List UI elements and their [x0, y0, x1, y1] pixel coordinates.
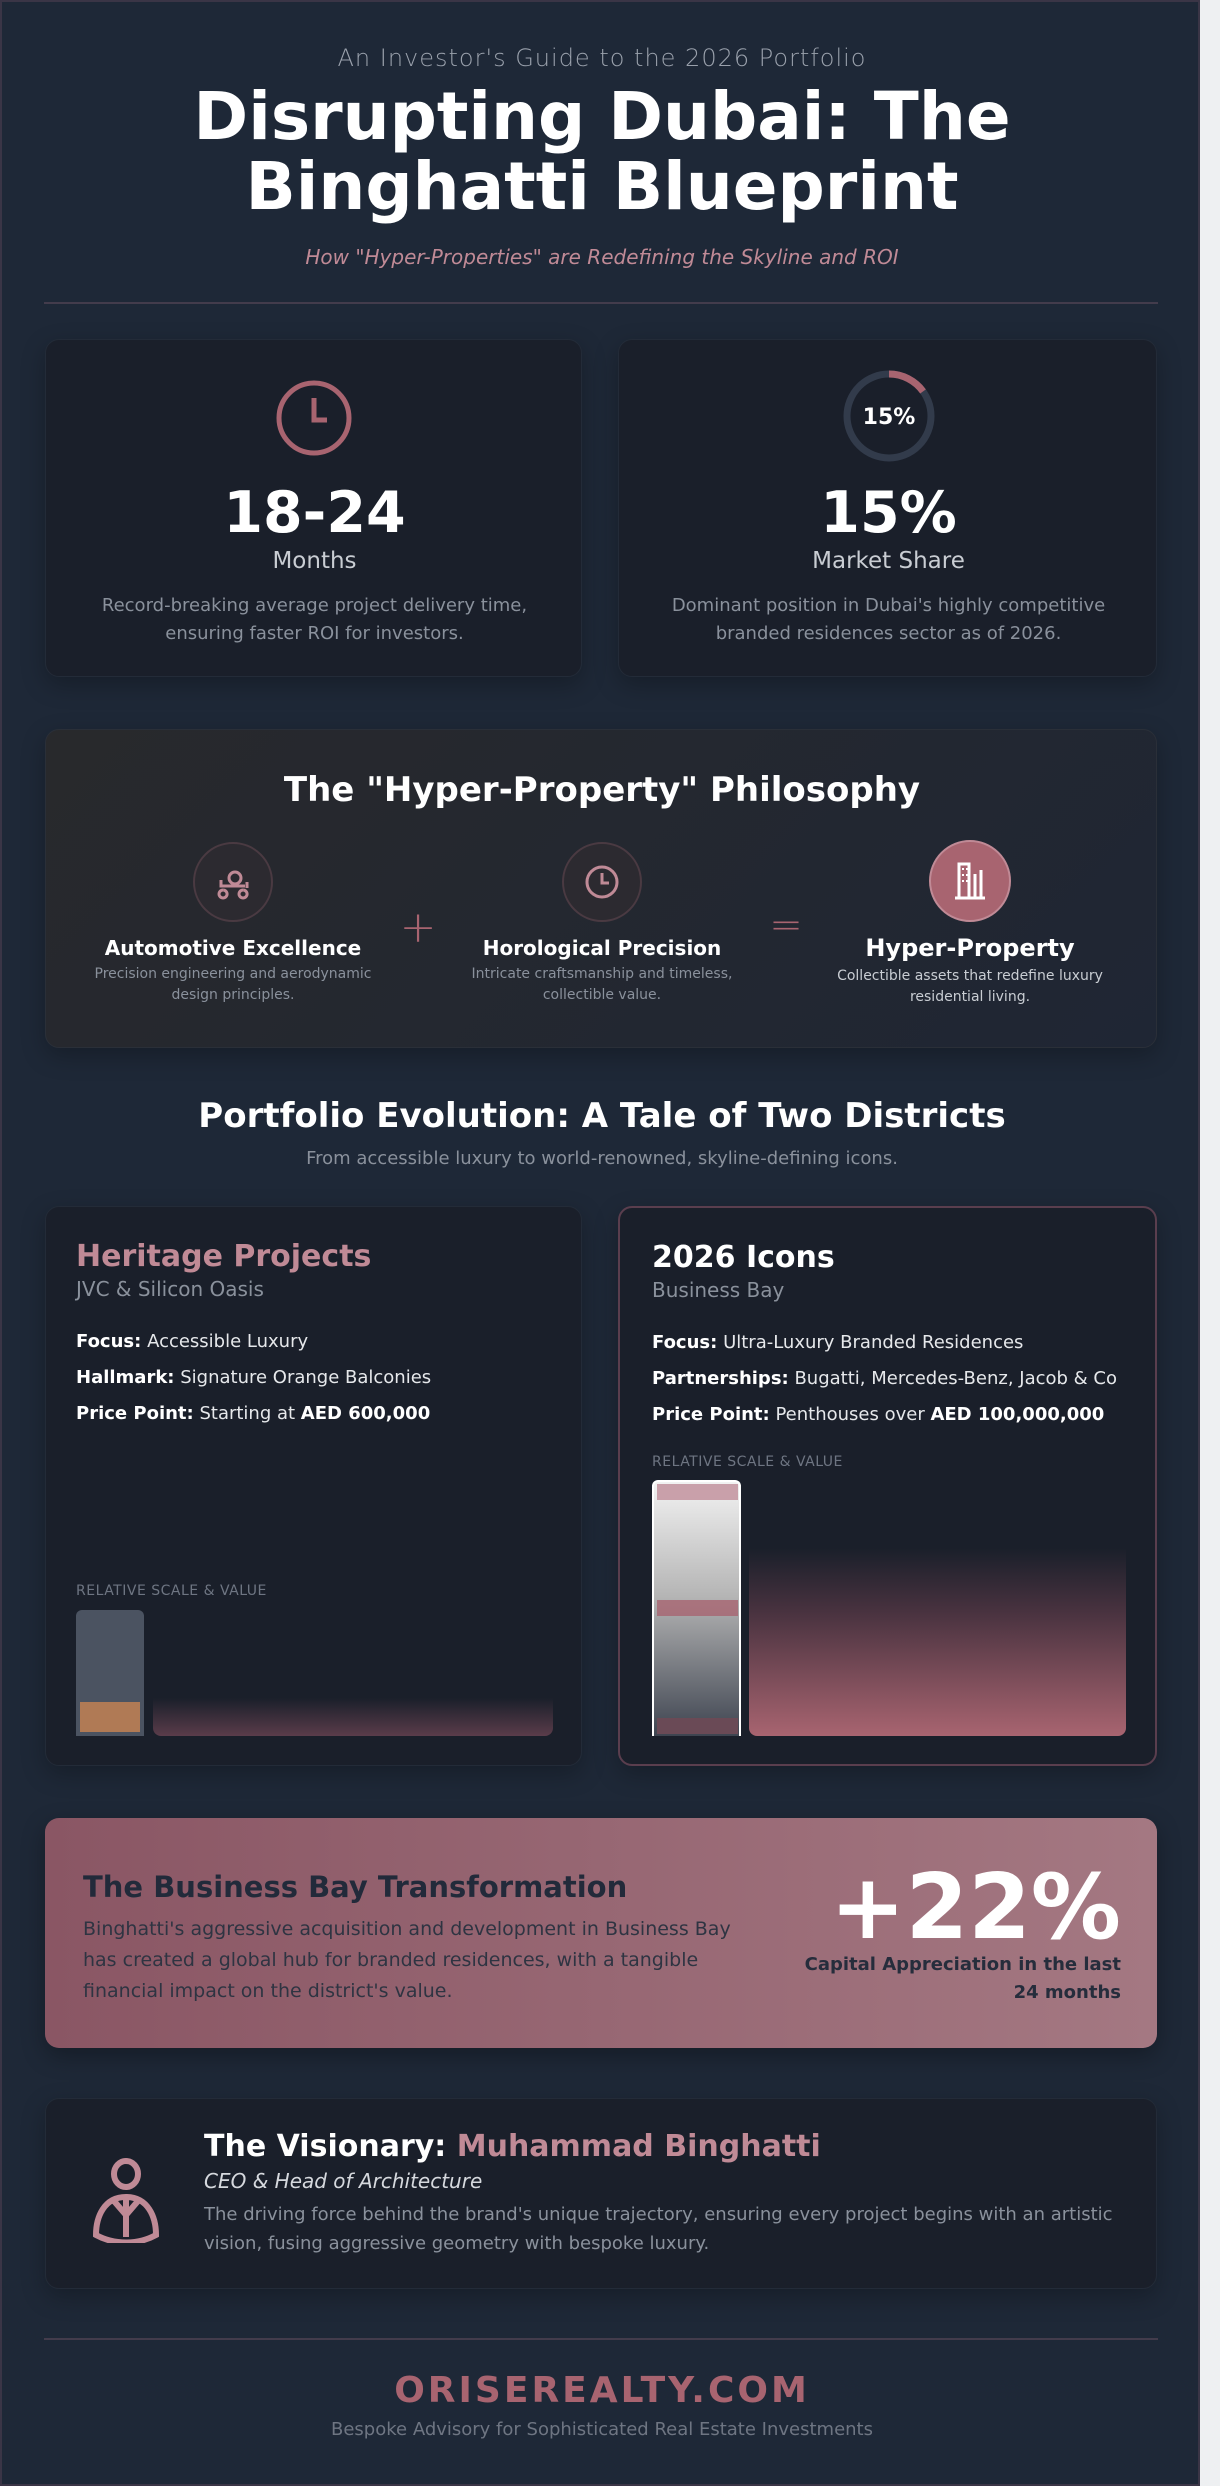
panel: the visionary: CEO & Head of Architecture: [204, 2169, 482, 2193]
panel: 2026 icons: 2026 Icons: [652, 1240, 835, 1275]
details: [76, 1331, 431, 1424]
item: hyper-property: Hyper-Property: [865, 934, 1075, 962]
section subheading: From accessible luxury to world-renowned, skyline-defining icons.: [306, 1148, 898, 1169]
value: 18-24: [223, 480, 406, 546]
stat card: market share: [618, 339, 1157, 677]
panel: hyper-property philosophy: [45, 729, 1157, 1048]
item: horological: Intricate craftsmanship and timeless, collectible value.: [472, 966, 732, 1003]
section heading: portfolio evolution: Portfolio Evolution: A Tale of Two Districts: [198, 1096, 1006, 1136]
panel: heritage projects: Heritage Projects: [76, 1239, 371, 1274]
panel: 2026 icons: RELATIVE SCALE & VALUE: [652, 1454, 843, 1470]
details: Partnerships: Bugatti, Mercedes-Benz, Jacob & Co: [652, 1368, 1117, 1389]
panel: heritage projects: [45, 1206, 582, 1766]
item: hyper-property: Collectible assets that redefine luxury residential living.: [837, 968, 1103, 1005]
details: Hallmark: Signature Orange Balconies: [76, 1367, 431, 1388]
donut chart 15%: [844, 370, 934, 462]
details: Price Point: Penthouses over AED 100,000,000: [652, 1404, 1104, 1425]
item: automotive: Automotive Excellence: [105, 936, 361, 960]
donut chart 15%: 15%: [863, 405, 915, 430]
details: Focus: Ultra-Luxury Branded Residences: [652, 1332, 1023, 1353]
equals sign: =: [769, 902, 803, 948]
item: horological: Horological Precision: [483, 936, 721, 960]
item: horological: [472, 842, 732, 1003]
stat card: market share: Dominant position in Dubai's highly competitive branded residences sector as of 2026.: [672, 595, 1105, 644]
details: Price Point: Starting at AED 600,000: [76, 1403, 430, 1424]
stat card: market share: 15%: [820, 480, 957, 546]
icon: car: [193, 842, 273, 922]
details: [652, 1332, 1117, 1425]
item: automotive: [94, 842, 371, 1003]
panel: heritage projects: JVC & Silicon Oasis: [76, 1277, 264, 1301]
footer tagline: Bespoke Advisory for Sophisticated Real Estate Investments: [331, 2419, 873, 2440]
tagline: How "Hyper-Properties" are Redefining the Skyline and ROI: [305, 245, 899, 269]
callout: business bay transformation: Capital Appreciation in the last 24 months: [805, 1954, 1121, 2003]
item: automotive: Precision engineering and aerodynamic design principles.: [94, 966, 371, 1003]
callout: business bay transformation: The Business Bay Transformation: [83, 1870, 627, 1904]
icon: person: [93, 2158, 159, 2243]
icon: watch: [562, 842, 642, 922]
stat card: market share: Market Share: [812, 548, 965, 574]
panel: the visionary: The Visionary: Muhammad Binghatti: [204, 2129, 821, 2164]
title: [193, 78, 1011, 225]
stat: +22%: +22%: [830, 1855, 1121, 1960]
panel: 2026 icons: Business Bay: [652, 1278, 784, 1302]
scale chart: tall tower: [652, 1480, 741, 1736]
stat card: delivery time: Months: [272, 548, 357, 574]
heading: The "Hyper-Property" Philosophy: [284, 770, 920, 810]
title: Binghatti Blueprint: [245, 148, 958, 225]
icon: building: [929, 840, 1011, 922]
plus sign: +: [400, 902, 436, 953]
callout: business bay transformation: [45, 1818, 1157, 2048]
stat card: delivery time: [45, 339, 582, 677]
header subtitle: An Investor's Guide to the 2026 Portfolio: [338, 44, 866, 72]
panel: the visionary: The driving force behind the brand's unique trajectory, ensuring every project begins with an artistic vision, fusing aggressive geometry with bespoke luxury.: [204, 2204, 1113, 2254]
panel: 2026 icons: [618, 1206, 1157, 1766]
panel: heritage projects: RELATIVE SCALE & VALUE: [76, 1583, 267, 1599]
icon: clock: [276, 380, 352, 456]
stat card: delivery time: Record-breaking average project delivery time, ensuring faster ROI for investors.: [102, 595, 527, 644]
title: Disrupting Dubai: The: [193, 78, 1011, 155]
details: Focus: Accessible Luxury: [76, 1331, 308, 1352]
scale chart: small tower: [76, 1610, 144, 1736]
panel: the visionary: [45, 2098, 1157, 2289]
callout: business bay transformation: Binghatti's aggressive acquisition and development in Business Bay has created a global hub for branded residences, with a tangible financial impact on the district's value.: [83, 1918, 731, 2002]
footer brand: ORISEREALTY.COM: [394, 2370, 810, 2411]
item: hyper-property: [837, 840, 1103, 1005]
